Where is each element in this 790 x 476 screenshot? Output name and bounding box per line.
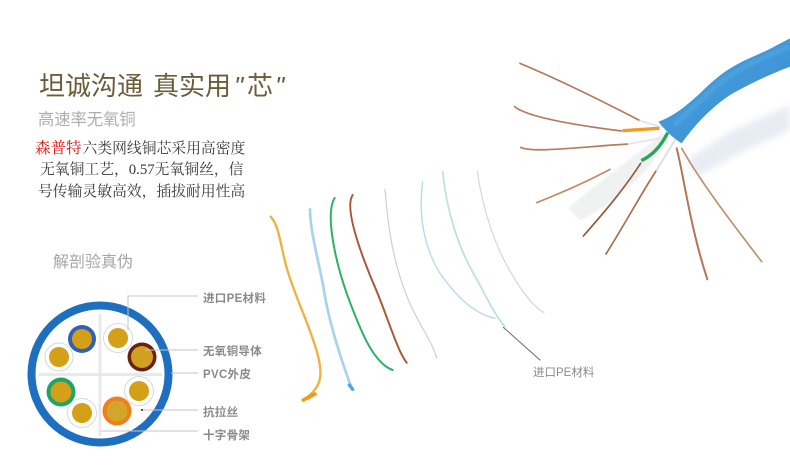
title	[39, 71, 286, 101]
copper strands	[515, 63, 762, 279]
green wire stub	[641, 133, 668, 161]
diagram labels: 无氧铜导体	[203, 344, 262, 358]
diagram labels: 抗拉丝	[203, 405, 238, 419]
diagram labels: 进口PE材料	[203, 291, 266, 305]
subtitle: 高速率无氧铜	[38, 111, 136, 129]
cross frame	[39, 314, 162, 436]
diagram labels: 十字骨架	[203, 428, 250, 442]
conductors	[45, 324, 156, 428]
cross-section diagram	[32, 306, 168, 442]
pale grey wire	[477, 172, 544, 313]
light blue wire end	[349, 385, 353, 389]
description text block	[35, 139, 245, 200]
title: "	[234, 71, 245, 101]
brown wire	[350, 195, 407, 363]
orange wire end	[303, 394, 315, 400]
title: "	[275, 71, 286, 101]
network cable photo	[515, 38, 790, 279]
description text block: 森普特六类网线铜芯采用高密度	[35, 139, 245, 157]
light blue wire	[310, 209, 352, 388]
title: 坦诚沟通	[39, 71, 143, 101]
strength thread dot	[141, 409, 143, 411]
green wire	[331, 198, 393, 370]
white filler fibres	[568, 132, 668, 221]
grey white wire	[385, 189, 437, 358]
diagram labels	[203, 291, 266, 442]
title: 真实用	[153, 71, 231, 101]
orange wire stub	[623, 128, 659, 131]
cable shadow	[687, 105, 790, 177]
PE material label: 进口PE材料	[533, 365, 595, 379]
description text block: 无氧铜工艺，0.57无氧铜丝，信	[40, 161, 244, 178]
PE pointer	[503, 327, 540, 360]
pale green wire	[443, 172, 505, 327]
leader lines	[101, 296, 198, 431]
PVC outer jacket ring	[32, 306, 168, 442]
separated wires	[271, 172, 544, 400]
blue jacket	[658, 38, 790, 143]
title: 芯	[247, 71, 273, 101]
diagram labels: PVC外皮	[203, 367, 251, 381]
section heading: teardown: 解剖验真伪	[53, 253, 133, 271]
orange wire	[271, 217, 321, 400]
jacket highlight	[673, 47, 790, 125]
description text block: 号传输灵敏高效，插拔耐用性高	[38, 182, 245, 200]
pale blue wire	[421, 182, 495, 318]
